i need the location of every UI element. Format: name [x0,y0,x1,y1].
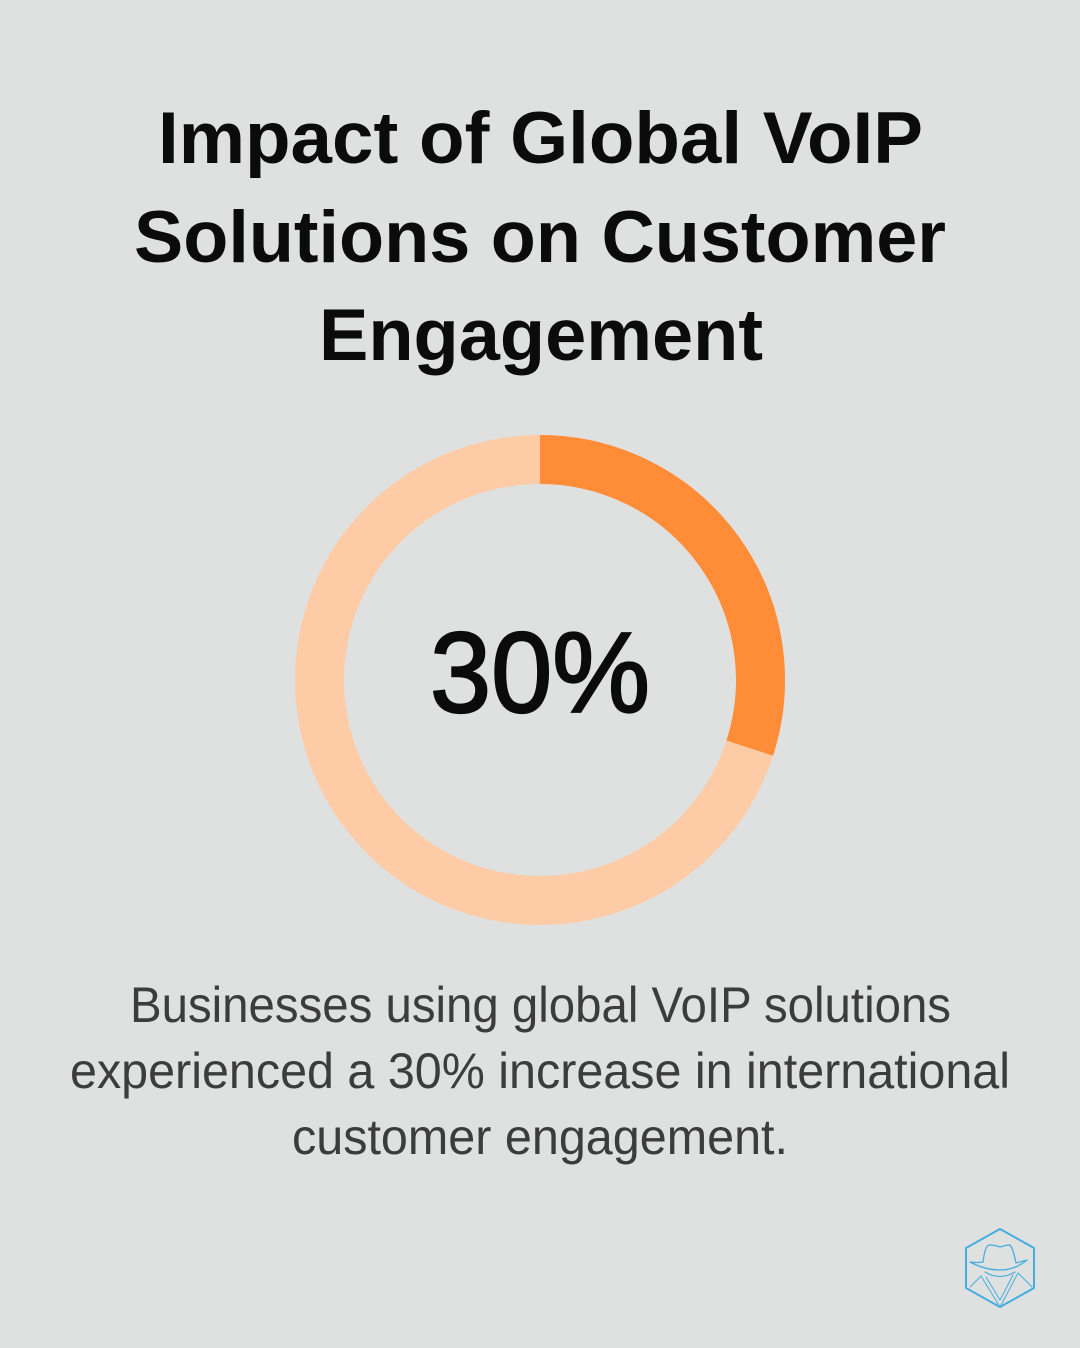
donut chart: 30% [320,460,760,900]
description text: Businesses using global VoIP solutions [130,977,951,1033]
logo coat [970,1273,1032,1307]
logo brim shadow [985,1272,1015,1276]
donut highlighted segment [540,460,760,748]
donut value: 30% [430,610,650,737]
description text [70,977,1010,1165]
icon: hexagon logo with spy hat [966,1229,1034,1307]
title: Impact of Global VoIP [158,98,923,179]
title: Solutions on Customer [134,197,946,278]
logo hat [970,1245,1027,1270]
logo hexagon [966,1229,1034,1307]
donut track [320,460,760,900]
description text: customer engagement. [292,1109,788,1165]
title: Engagement [319,295,763,376]
description text: experienced a 30% increase in international [70,1043,1010,1099]
title [134,98,946,376]
